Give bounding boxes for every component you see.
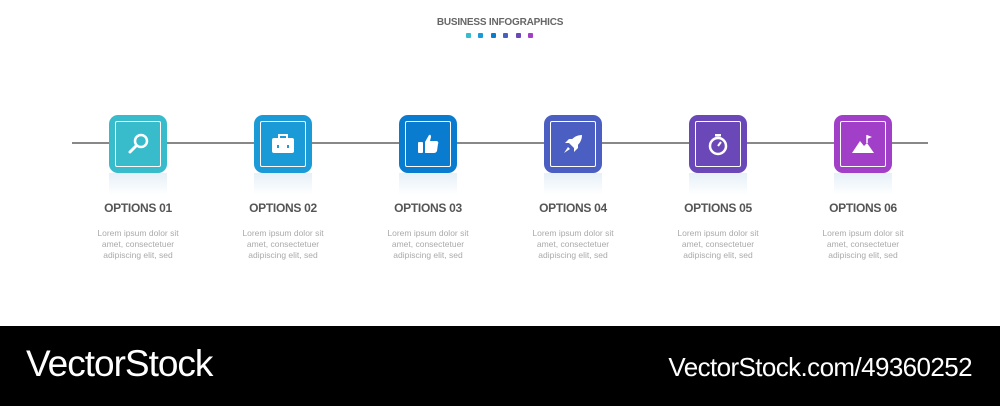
step 2: [242, 115, 324, 260]
step 2: Lorem ipsum dolor sit: [242, 228, 324, 238]
footer bar: [0, 326, 1000, 406]
step 2: adipiscing elit, sed: [248, 250, 318, 260]
title dots: [466, 33, 533, 38]
step 6: [822, 115, 904, 260]
step 1: OPTIONS 01: [104, 201, 172, 215]
footer url: VectorStock.com/49360252: [668, 352, 972, 382]
step 4: [532, 115, 614, 260]
step 1: adipiscing elit, sed: [103, 250, 173, 260]
step 6: OPTIONS 06: [829, 201, 897, 215]
step 5: amet, consectetuer: [682, 239, 754, 249]
timeline line: [72, 142, 928, 144]
title: BUSINESS INFOGRAPHICS: [437, 17, 563, 28]
icon: briefcase: [254, 115, 312, 173]
step 2: amet, consectetuer: [247, 239, 319, 249]
step 5: [677, 115, 759, 260]
step 5: OPTIONS 05: [684, 201, 752, 215]
step 6: adipiscing elit, sed: [828, 250, 898, 260]
icon: stopwatch: [689, 115, 747, 173]
step 5: adipiscing elit, sed: [683, 250, 753, 260]
icon: magnifier: [109, 115, 167, 173]
step 1: [97, 115, 179, 260]
step 3: [387, 115, 469, 260]
step 1: Lorem ipsum dolor sit: [97, 228, 179, 238]
icon: thumbs up: [399, 115, 457, 173]
step 6: amet, consectetuer: [827, 239, 899, 249]
step 2: OPTIONS 02: [249, 201, 317, 215]
step 4: adipiscing elit, sed: [538, 250, 608, 260]
step 3: Lorem ipsum dolor sit: [387, 228, 469, 238]
step 4: amet, consectetuer: [537, 239, 609, 249]
step 6: Lorem ipsum dolor sit: [822, 228, 904, 238]
step 5: Lorem ipsum dolor sit: [677, 228, 759, 238]
icon: rocket: [544, 115, 602, 173]
step 4: OPTIONS 04: [539, 201, 607, 215]
step 3: OPTIONS 03: [394, 201, 462, 215]
step 3: adipiscing elit, sed: [393, 250, 463, 260]
icon: mountain flag: [834, 115, 892, 173]
footer logo: VectorStock: [26, 343, 212, 384]
step 1: amet, consectetuer: [102, 239, 174, 249]
step 4: Lorem ipsum dolor sit: [532, 228, 614, 238]
step 3: amet, consectetuer: [392, 239, 464, 249]
